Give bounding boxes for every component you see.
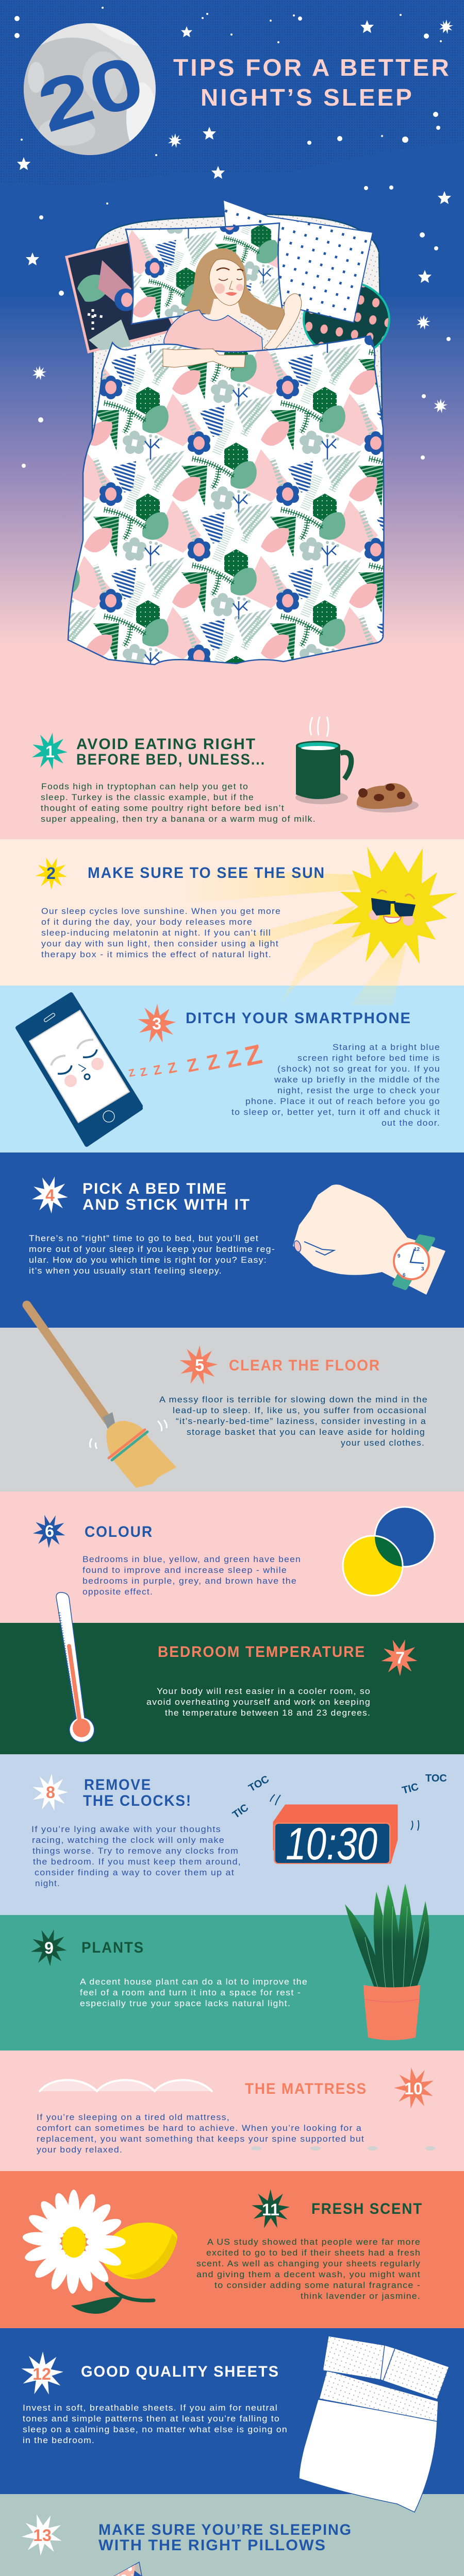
body text: your day with sun light, then consider using a light: [41, 939, 279, 948]
body text: Your body will rest easier in a cooler room, so: [157, 1686, 371, 1696]
body text: opposite effect.: [82, 1587, 153, 1597]
body text: storage basket that you can leave aside for holding: [187, 1427, 425, 1437]
badge 4: [31, 1175, 70, 1215]
badge 6: [30, 1512, 69, 1551]
body text: A messy floor is terrible for slowing down the mind in the: [159, 1395, 428, 1404]
panel: tip 10: [0, 2050, 464, 2171]
heading: GOOD QUALITY SHEETS: [81, 2363, 279, 2380]
body text: [31, 1824, 241, 1888]
body text: Foods high in tryptophan can help you get to: [41, 782, 248, 791]
heading: MAKE SURE YOU’RE SLEEPING: [98, 2521, 352, 2538]
body text: think lavender or jasmine.: [301, 2291, 421, 2301]
badge 8: [31, 1773, 69, 1812]
body text: [146, 1686, 371, 1718]
icon: hand with wristwatch: 12: [414, 1247, 420, 1252]
body text: feel of a room and turn it into a space for rest -: [80, 1988, 301, 1997]
body text: tones and simple patterns then at least you’re falling to: [23, 2414, 280, 2424]
snore letters: Z: [205, 1050, 222, 1075]
tic toc sound words: TIC: [230, 1802, 251, 1821]
title: NIGHT’S SLEEP: [201, 84, 414, 111]
icon: sleeping smartphone: [18, 994, 141, 1145]
icon: thermometer: [56, 1592, 94, 1742]
body text: (shock) not so great for you. If you: [277, 1064, 440, 1074]
body text: comfort can sometimes be hard to achieve. When you’re looking for a: [37, 2123, 362, 2133]
body text: bedrooms in purple, grey, and brown have the: [82, 1576, 297, 1586]
panel: tip 11: [0, 2171, 464, 2328]
badge 10: 10: [404, 2079, 423, 2098]
icon: chocolate chip cookie: [357, 783, 419, 812]
badge 12: [19, 2349, 66, 2398]
badge 4: 4: [45, 1186, 55, 1205]
badge 11: [249, 2187, 293, 2232]
badge 3: [136, 1002, 178, 1046]
icon: smiling sun with sunglasses: [332, 846, 457, 964]
panel: tip 1: [0, 647, 464, 839]
body text: screen right before bed time is: [297, 1053, 440, 1063]
heading: COLOUR: [85, 1523, 153, 1540]
moon with number 20: [24, 23, 156, 155]
body text: out the door.: [382, 1118, 440, 1128]
heading: PLANTS: [81, 1939, 144, 1956]
heading: WITH THE RIGHT PILLOWS: [98, 2537, 326, 2554]
badge 12: 12: [32, 2365, 51, 2383]
neck and shirt: [209, 299, 242, 319]
panel: tip 6: [33, 1506, 435, 1596]
body text: A US study showed that people were far more: [207, 2237, 421, 2247]
body text: night.: [35, 1878, 60, 1888]
arm across blanket: [163, 349, 245, 367]
panel: tip 7: [0, 1592, 464, 1754]
venn diagram of colours: [343, 1507, 435, 1596]
hair: [183, 248, 288, 330]
body text: excited to go to bed if their sheets had a fresh: [206, 2248, 421, 2258]
patterned front pillow: [126, 223, 283, 324]
icon: striped marbled pillow: [26, 2562, 246, 2576]
tic toc sound words: TIC: [401, 1781, 420, 1797]
badge 13: [18, 2510, 67, 2560]
icon: mattress springs: [40, 2080, 436, 2150]
heading: MAKE SURE TO SEE THE SUN: [88, 865, 325, 882]
body text: scent. As well as changing your sheets regularly: [196, 2259, 421, 2268]
badge 2: [34, 855, 70, 892]
icon: hand with wristwatch: [293, 1184, 445, 1295]
snore letters: [127, 1039, 264, 1079]
body text: especially true your space lacks natural light.: [80, 1998, 291, 2008]
badge 13: 13: [33, 2526, 52, 2545]
body text: A decent house plant can do a lot to improve the: [80, 1977, 308, 1987]
snore letters: Z: [139, 1065, 148, 1079]
body text: of it during the day, your body releases more: [41, 917, 253, 927]
snore letters: Z: [185, 1054, 200, 1076]
body text: [159, 1395, 428, 1448]
panel: tip 9: [0, 1915, 464, 2050]
body text: [23, 2403, 288, 2445]
round teal cushion: [304, 282, 389, 357]
badge 11: 11: [262, 2200, 279, 2219]
body text: super appealing, then try a banana or a warm mug of milk.: [41, 814, 316, 824]
body text: lead-up to sleep. If, like us, you suffer from occasional: [173, 1405, 427, 1415]
heading: BEFORE BED, UNLESS...: [76, 751, 266, 768]
title: [173, 54, 451, 111]
body text: [231, 1042, 440, 1128]
body text: night, resist the urge to check your: [277, 1086, 440, 1095]
badge 1: 1: [45, 742, 55, 761]
heading: THE MATTRESS: [245, 2080, 367, 2097]
body text: [196, 2237, 421, 2301]
body text: thought of eating some poultry right before bed isn’t: [41, 803, 285, 813]
dark patterned cushion: [67, 240, 175, 352]
heading: AVOID EATING RIGHT: [76, 736, 256, 753]
panel: tip 5: [0, 1305, 464, 1492]
body text: in the bedroom.: [23, 2435, 95, 2445]
icon: hand with wristwatch: 3: [421, 1266, 424, 1272]
body text: things worse. Try to remove any clocks from: [32, 1846, 239, 1856]
icon: bed with white sheets: [299, 2336, 449, 2512]
icon: potted plant: [345, 1884, 429, 2040]
sun rays: [175, 868, 406, 1006]
badge 9: [29, 1927, 69, 1968]
body text: found to improve and increase sleep - while: [82, 1565, 287, 1575]
patterned blanket: [68, 336, 384, 665]
body text: replacement, you want something that keeps your spine supported but: [37, 2134, 364, 2144]
panel: tip 4: [0, 1153, 464, 1328]
snore letters: Z: [152, 1062, 163, 1078]
badge 6: 6: [45, 1522, 54, 1540]
illustration: woman asleep in bed: [67, 200, 389, 665]
body text: your body relaxed.: [37, 2145, 123, 2155]
heading: [98, 2521, 352, 2554]
body text: [37, 2112, 364, 2155]
icon: broom: [27, 1305, 176, 1488]
badge 10: [389, 2062, 440, 2114]
panel: tip 12: [0, 2328, 464, 2494]
badge 9: 9: [44, 1939, 54, 1957]
polka dot pillow: [223, 200, 373, 323]
heading: FRESH SCENT: [311, 2200, 423, 2217]
tic toc sound words: [230, 1773, 447, 1831]
icon: lemon and daisy: [22, 2190, 177, 2314]
heading: DITCH YOUR SMARTPHONE: [186, 1010, 411, 1027]
snore letters: Z: [166, 1059, 178, 1077]
body text: and giving them a decent wash, you might want: [196, 2269, 421, 2279]
badge 7: [379, 1637, 420, 1679]
snore letters: Z: [127, 1067, 136, 1079]
panel: tip 2: [0, 839, 464, 1006]
tic toc sound words: TOC: [246, 1773, 271, 1794]
heading: AND STICK WITH IT: [82, 1196, 251, 1213]
panel: tip 3: [0, 986, 464, 1153]
body text: [82, 1554, 301, 1597]
body text: the bedroom. If you must keep them around,: [33, 1857, 241, 1867]
heading: BEDROOM TEMPERATURE: [158, 1643, 366, 1660]
body text: sleep-inducing melatonin at night. If you can’t fill: [41, 928, 271, 938]
body text: If you’re sleeping on a tired old mattress,: [37, 2112, 230, 2122]
body text: Invest in soft, breathable sheets. If you aim for neutral: [23, 2403, 278, 2413]
badge 5: 5: [195, 1356, 204, 1375]
body text: sleep. Turkey is the classic example, but if the: [41, 792, 254, 802]
face: [209, 259, 244, 306]
title: TIPS FOR A BETTER: [173, 54, 451, 81]
body text: [29, 1233, 275, 1276]
heading: CLEAR THE FLOOR: [229, 1357, 380, 1374]
badge 7: 7: [395, 1649, 405, 1667]
raised hand: [264, 294, 302, 351]
body text: [41, 782, 316, 824]
body text: wake up briefly in the middle of the: [274, 1075, 440, 1084]
icon: hand with wristwatch: 6: [403, 1273, 406, 1278]
body text: There’s no “right” time to go to bed, but you’ll get: [29, 1233, 259, 1243]
body text: If you’re lying awake with your thoughts: [31, 1824, 221, 1834]
badge 2: 2: [46, 864, 56, 883]
heading: PICK A BED TIME: [82, 1180, 227, 1197]
body text: Staring at a bright blue: [333, 1042, 440, 1052]
body text: therapy box - it mimics the effect of natural light.: [41, 950, 272, 959]
stars in the night sky: [14, 7, 453, 468]
body text: it’s when you usually start feeling sleepy.: [29, 1266, 222, 1276]
body text: “it’s-nearly-bed-time” laziness, consider investing in a: [176, 1416, 426, 1426]
body text: sleep on a calming base, no matter what else is going on: [23, 2425, 288, 2434]
body text: Our sleep cycles love sunshine. When you get more: [41, 906, 281, 916]
mattress and headboard: [92, 214, 383, 441]
moon with number 20: 20: [29, 40, 153, 147]
panel: tip 13: [0, 2494, 464, 2576]
snore letters: Z: [242, 1039, 264, 1072]
tic toc sound words: TOC: [425, 1773, 447, 1784]
heading: [76, 736, 266, 768]
body text: racing, watching the clock will only make: [32, 1835, 225, 1845]
body text: phone. Place it out of reach before you go: [245, 1096, 440, 1106]
badge 8: 8: [46, 1783, 55, 1802]
body text: to sleep or, better yet, turn it off and chuck it: [231, 1107, 440, 1117]
badge 3: 3: [152, 1014, 161, 1033]
body text: Bedrooms in blue, yellow, and green have been: [82, 1554, 301, 1564]
body text: the temperature between 18 and 23 degrees.: [165, 1708, 371, 1718]
heading: REMOVE: [84, 1776, 152, 1793]
snore letters: Z: [224, 1044, 243, 1073]
body text: consider finding a way to cover them up at: [35, 1868, 235, 1877]
panel: tip 8: [0, 1754, 464, 2040]
badge 5: [178, 1344, 220, 1387]
panel: hero: [1, 1, 463, 666]
body text: ular. How do you which time is right for you? Easy:: [29, 1255, 267, 1265]
body text: [41, 906, 281, 959]
body text: avoid overheating yourself and work on keeping: [146, 1697, 371, 1707]
badge 1: [32, 733, 68, 770]
heading: [82, 1180, 251, 1213]
body text: your used clothes.: [341, 1438, 425, 1448]
icon: hand with wristwatch: 9: [397, 1253, 401, 1259]
body text: [80, 1977, 308, 2008]
body text: more out of your sleep if you keep your bedtime reg-: [29, 1244, 275, 1254]
body text: to consider adding some natural fragrance -: [214, 2280, 421, 2290]
heading: THE CLOCKS!: [83, 1792, 192, 1809]
heading: [83, 1776, 192, 1809]
icon: digital alarm clock: 10:30: [286, 1818, 377, 1869]
icon: mug of milk: [295, 717, 351, 804]
